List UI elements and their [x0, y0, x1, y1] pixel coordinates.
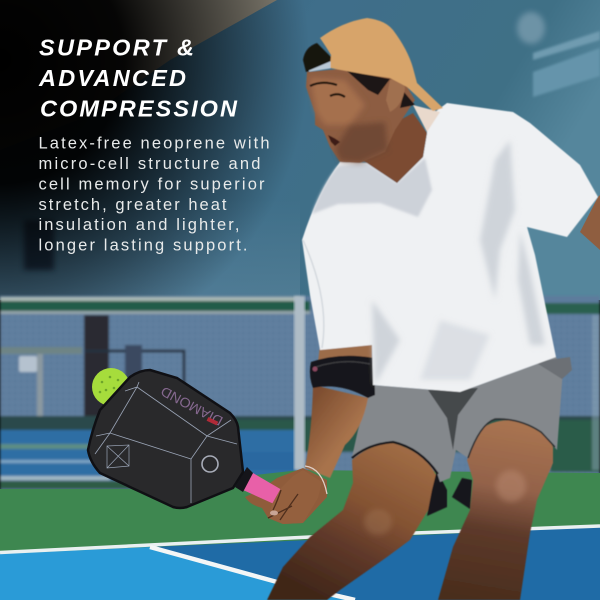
grip end: [292, 502, 309, 513]
paddle lines: [95, 382, 237, 503]
background: building wall: [0, 0, 600, 300]
forearm: [305, 385, 368, 478]
shorts crotch shadow: [428, 388, 478, 450]
wall box: [533, 48, 600, 97]
dark blue zone: [150, 527, 600, 600]
shorts: [352, 357, 563, 482]
body text: [38, 134, 270, 254]
square graphic: [107, 445, 129, 468]
paddle face: [88, 370, 243, 508]
cap strap: [309, 62, 330, 71]
wall lamp fixture: [517, 12, 545, 44]
ear: [386, 79, 405, 112]
sideburn hair: [347, 71, 415, 108]
net top band: [0, 297, 300, 301]
heading: COMPRESSION: [40, 96, 238, 122]
bright blue zone: [0, 547, 360, 600]
knee highlight left: [364, 509, 392, 535]
wrist bracelet: [305, 466, 327, 494]
collar tag area: [413, 105, 440, 132]
face light: [310, 78, 365, 125]
left leg: [267, 443, 437, 600]
elbow compression strap: [310, 356, 375, 398]
fingers over grip: [268, 470, 322, 524]
player: [267, 18, 598, 600]
shorts flap: [535, 357, 572, 379]
base strip: [0, 416, 600, 430]
window on wall: [24, 220, 54, 270]
neck: [345, 113, 427, 183]
dark pillar: [84, 315, 109, 423]
court fence and background courts: [0, 296, 600, 496]
dark goal frame: [84, 351, 184, 385]
near court: [0, 470, 600, 600]
face: [306, 68, 415, 163]
shirt: [302, 103, 598, 392]
fence mesh: [0, 312, 600, 482]
body text: insulation and lighter,: [38, 216, 240, 234]
right leg: [438, 420, 553, 600]
logo circle: [202, 456, 218, 472]
eye and brow: [310, 83, 345, 97]
body text: micro-cell structure and: [38, 155, 260, 173]
body text: Latex-free neoprene with: [38, 134, 270, 152]
upper arm above band: [318, 342, 372, 362]
shirt fold shadows: [372, 140, 545, 385]
baseball cap: [320, 18, 443, 111]
inner short lining: [427, 470, 472, 516]
paddle collar: [235, 467, 253, 492]
knee highlight right: [496, 470, 526, 502]
right arm: [580, 195, 600, 250]
heading: [38, 34, 238, 122]
right fence section: [592, 315, 600, 470]
handle pink grip: [243, 473, 282, 504]
pole: [294, 296, 305, 470]
sign: [19, 356, 37, 372]
green court: [0, 470, 600, 600]
shirt shadow at collar: [312, 158, 432, 217]
left back post: [37, 350, 43, 426]
far court blue: [0, 430, 296, 480]
roof underside wedge: [0, 0, 277, 150]
body text: cell memory for superior: [38, 176, 265, 194]
beard shadow: [335, 122, 388, 163]
left dark overlay: [0, 0, 340, 300]
heading: ADVANCED: [38, 65, 186, 91]
court baseline: [0, 526, 600, 552]
body text: stretch, greater heat: [38, 196, 227, 214]
hair at cap opening: [303, 43, 332, 72]
finger nail: [270, 510, 278, 516]
red label: [207, 417, 218, 425]
mouth: [328, 135, 340, 146]
sleeve seam: [303, 240, 324, 348]
body text: longer lasting support.: [38, 236, 248, 254]
wall ledge: [533, 31, 600, 60]
DIAMOND wordmark: DIAMOND: [158, 383, 225, 429]
pickleball: [92, 368, 130, 406]
heading: SUPPORT &: [39, 34, 194, 60]
shorts hem dark: [352, 442, 438, 474]
paddle: [88, 370, 309, 513]
hand palm behind grip: [245, 468, 327, 524]
service line: [150, 547, 355, 600]
